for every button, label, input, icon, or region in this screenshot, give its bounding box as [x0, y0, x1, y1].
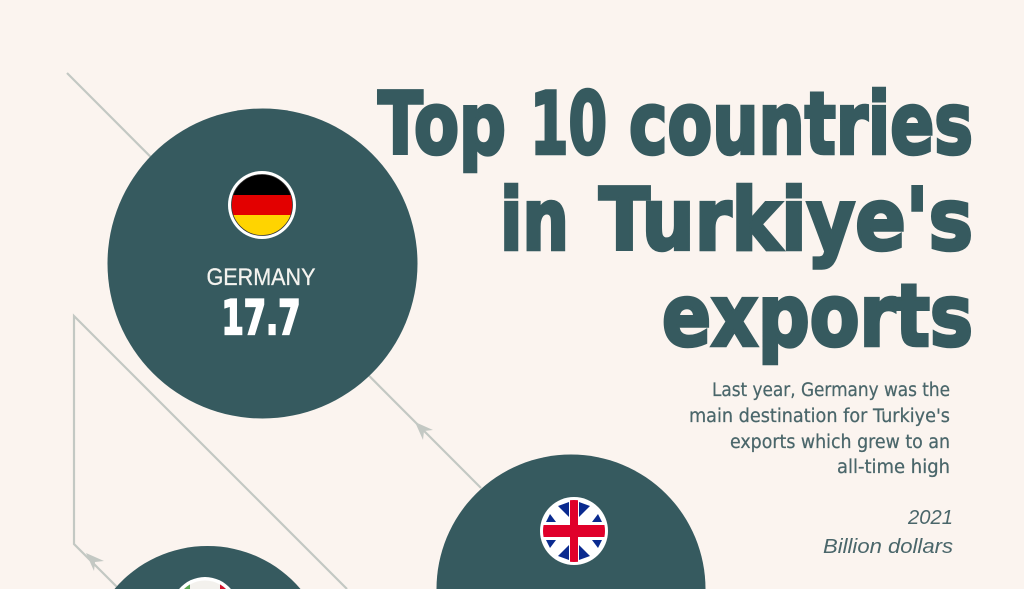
year and unit note: [823, 507, 953, 558]
panel: Germany: [108, 108, 418, 418]
description text: main destination for Turkiye's: [689, 406, 950, 427]
value: 17.7: 17.7: [222, 291, 300, 346]
description text: all-time high: [837, 457, 950, 478]
icon: Italy flag: [179, 577, 231, 589]
connector line: Germany to UK: [67, 73, 481, 488]
title: exports: [662, 266, 973, 366]
title: Top: [378, 74, 506, 174]
year and unit note: Billion dollars: [823, 536, 953, 558]
panel: United Kingdom: [436, 455, 706, 589]
panel: Italy: [114, 546, 300, 589]
icon: UK flag: [540, 497, 608, 565]
connector line: Italy upward path: [74, 316, 347, 589]
year and unit note: 2021: [907, 507, 953, 529]
description text: [689, 380, 950, 478]
description text: Last year, Germany was the: [712, 380, 950, 401]
title: Turkiye's: [599, 170, 973, 270]
title: 10: [530, 74, 607, 174]
title: in: [500, 170, 569, 270]
title: [378, 74, 973, 366]
icon: Germany flag: [228, 171, 296, 239]
label: Germany: GERMANY: [206, 264, 316, 291]
description text: exports which grew to an: [730, 432, 950, 453]
